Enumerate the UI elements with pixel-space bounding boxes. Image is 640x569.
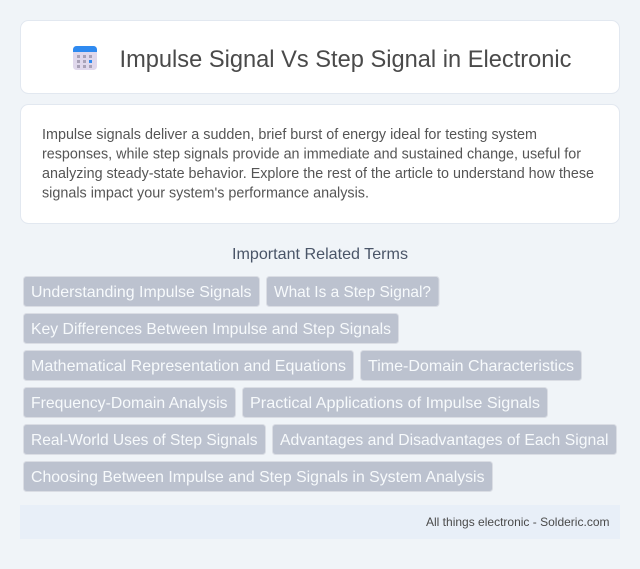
tag: practical applications (242, 388, 548, 418)
tag: time-domain characteristics (360, 350, 582, 380)
tag: understanding impulse signals: Understanding Impulse Signals (31, 284, 252, 301)
panel: intro card (20, 104, 620, 224)
tag: frequency-domain analysis: Frequency-Domain Analysis (31, 395, 228, 412)
tag: mathematical representation: Mathematical Representation and Equations (31, 358, 346, 375)
intro text block: analyzing steady-state behavior. Explore the rest of the article to understand how these (42, 166, 594, 182)
tag: mathematical representation (24, 350, 354, 380)
tag list (24, 276, 616, 492)
tag: time-domain characteristics: Time-Domain Characteristics (368, 358, 574, 375)
tag: practical applications: Practical Applications of Impulse Signals (250, 395, 540, 412)
footer credit: All things electronic - Solderic.com (426, 515, 610, 529)
tag: understanding impulse signals (24, 276, 260, 306)
panel: header card (20, 20, 620, 94)
tag: choosing between: Choosing Between Impulse and Step Signals in System Analysis (31, 469, 484, 486)
tag: choosing between (24, 462, 492, 492)
panel: footer (20, 505, 620, 539)
tag: advantages and disadvantages (272, 424, 616, 454)
intro text block: responses, while step signals provide an immediate and sustained change, useful for (42, 146, 581, 162)
tag: what is a step signal (266, 276, 439, 306)
title: Impulse Signal Vs Step Signal in Electronic (120, 46, 572, 73)
tag: what is a step signal: What Is a Step Signal? (274, 284, 431, 301)
intro text block: Impulse signals deliver a sudden, brief burst of energy ideal for testing system (42, 127, 537, 143)
tag: real-world uses (24, 424, 266, 454)
heading: important related terms: Important Related Terms (232, 246, 408, 263)
tag: frequency-domain analysis (24, 388, 236, 418)
icon: calendar (73, 46, 97, 70)
tag: key differences (24, 314, 398, 344)
tag: key differences: Key Differences Between Impulse and Step Signals (31, 321, 391, 338)
intro text block (42, 127, 594, 202)
tag: advantages and disadvantages: Advantages and Disadvantages of Each Signal (280, 432, 608, 449)
intro text block: signals impact your system's performance analysis. (42, 186, 369, 202)
tag: real-world uses: Real-World Uses of Step Signals (31, 432, 258, 449)
